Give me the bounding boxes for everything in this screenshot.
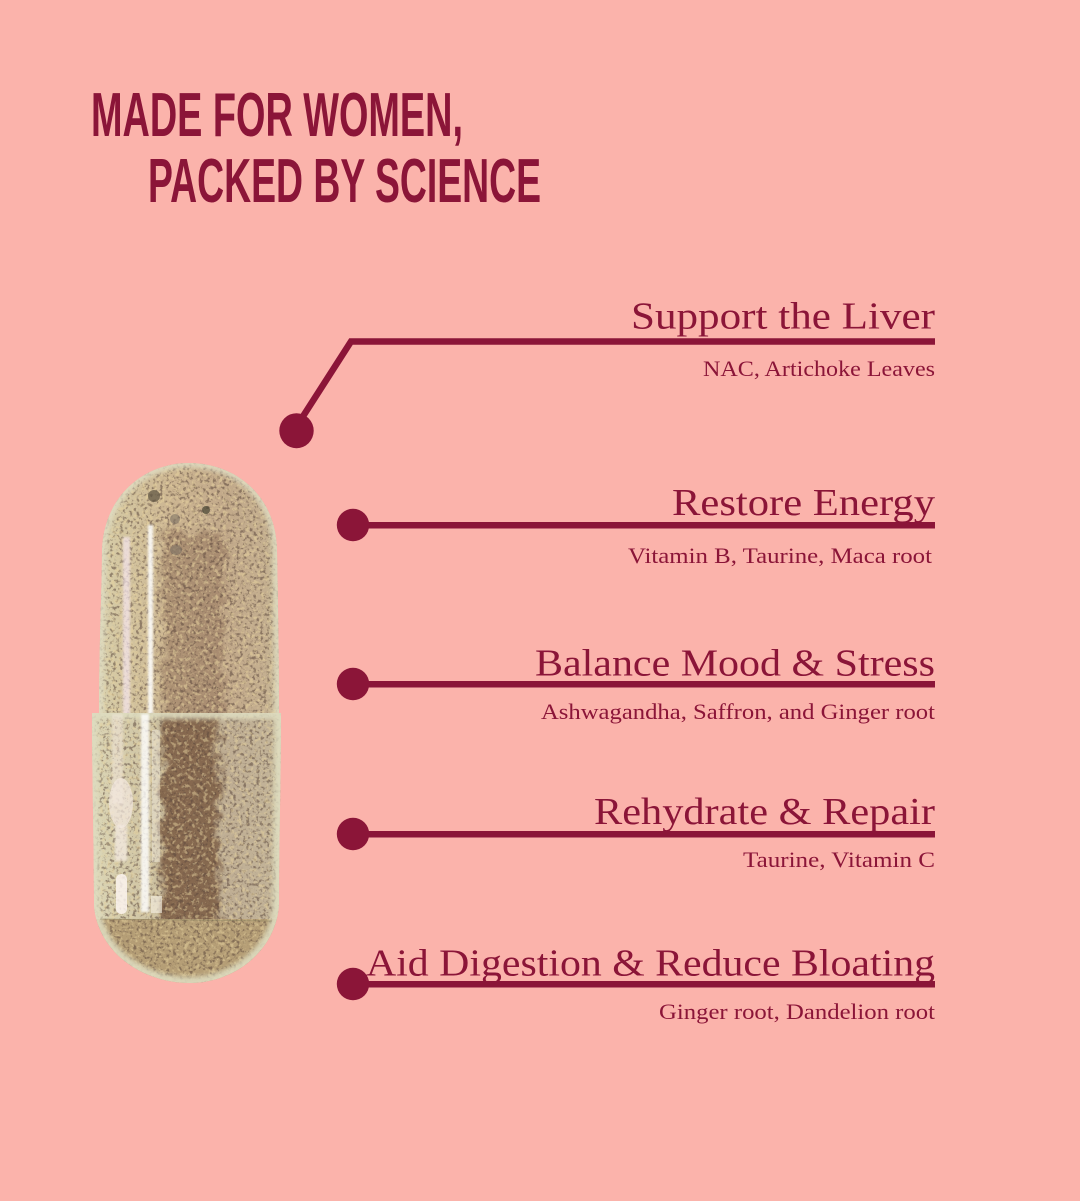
title: MADE FOR WOMEN,: [91, 81, 463, 150]
capsule upper shell: [99, 463, 279, 713]
title: PACKED BY SCIENCE: [148, 147, 541, 216]
callout: Balance Mood & Stress: Balance Mood & Stress: [535, 642, 935, 684]
callout: Rehydrate & Repair: Taurine, Vitamin C: [743, 847, 935, 872]
connector and dot: [337, 668, 935, 700]
callout: Rehydrate & Repair: Rehydrate & Repair: [594, 791, 935, 833]
callout: Aid Digestion & Reduce Bloating: Ginger root, Dandelion root: [659, 999, 935, 1024]
connector and dot: [337, 818, 935, 850]
callout: Balance Mood & Stress: Ashwagandha, Saffron, and Ginger root: [541, 699, 935, 724]
callout: Balance Mood & Stress: [337, 642, 935, 724]
connector and dot: [337, 509, 935, 541]
callout: Restore Energy: Restore Energy: [672, 482, 935, 524]
connector and dot: [337, 968, 935, 1000]
title: [91, 81, 541, 216]
capsule illustration: [90, 460, 285, 990]
capsule lower shell: [90, 700, 285, 990]
callout: Restore Energy: Vitamin B, Taurine, Maca root: [628, 543, 932, 568]
callout: Aid Digestion & Reduce Bloating: Aid Digestion & Reduce Bloating: [366, 942, 935, 984]
callout: Support the Liver: Support the Liver: [631, 296, 935, 338]
callout: Support the Liver: NAC, Artichoke Leaves: [703, 356, 935, 381]
callout: Restore Energy: [337, 482, 935, 568]
connector and dot: [279, 342, 935, 448]
callout: Aid Digestion & Reduce Bloating: [337, 942, 935, 1024]
callout: Support the Liver: [279, 296, 935, 448]
callout: Rehydrate & Repair: [337, 791, 935, 872]
